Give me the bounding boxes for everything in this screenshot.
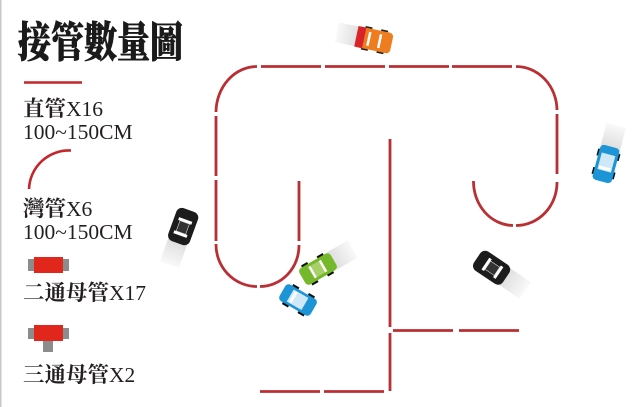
title: 接管數量圖: [18, 19, 183, 67]
car: blue center: [277, 281, 319, 319]
icon: two-way connector: [28, 257, 69, 273]
car: black left: [159, 206, 200, 269]
curved pipe label: [23, 197, 133, 244]
car: green: [297, 239, 358, 288]
icon: straight pipe: [24, 81, 82, 84]
straight pipe label: 100~150CM: [23, 120, 133, 144]
legend: three-way connector: [23, 325, 135, 387]
two-way connector label: 二通母管X17: [23, 281, 146, 305]
car: blue right: [590, 122, 627, 184]
track layout: [216, 66, 557, 391]
straight pipe label: [23, 97, 133, 144]
three-way connector label: 三通母管X2: [23, 363, 135, 387]
car: orange: [334, 20, 394, 55]
legend: curved pipe: [23, 150, 133, 244]
icon: three-way connector: [28, 325, 69, 352]
center branch: [393, 329, 519, 332]
curved pipe label: 100~150CM: [23, 220, 133, 244]
legend: straight pipe: [23, 82, 133, 144]
legend: two-way connector: [23, 257, 146, 305]
top run: [216, 66, 557, 112]
right run and hook: [473, 114, 557, 226]
car: black right: [471, 248, 532, 300]
curved pipe label: 灣管X6: [23, 197, 93, 221]
icon: curved pipe: [29, 150, 71, 189]
center spine: [389, 139, 391, 391]
straight pipe label: 直管X16: [23, 97, 103, 121]
left run and U-turn: [216, 116, 299, 287]
bottom branch: [260, 390, 384, 393]
